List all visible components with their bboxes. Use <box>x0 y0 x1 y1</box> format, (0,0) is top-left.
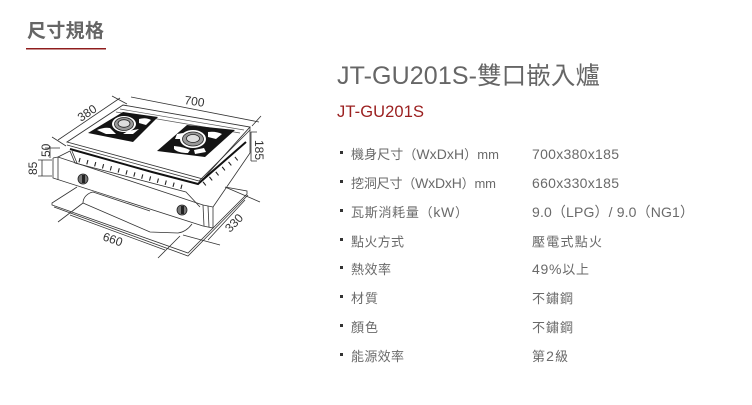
spec row: color: 顏色 <box>351 320 378 335</box>
dimension: 85: 85 <box>26 161 40 175</box>
spec row: gas consumption: 瓦斯消耗量（kW） <box>351 204 468 220</box>
cutout plate <box>52 187 248 256</box>
dimension: 50 <box>39 143 60 158</box>
spec row: thermal efficiency: 49%以上 <box>532 261 589 277</box>
spec row: energy rating: 第2級 <box>532 348 568 364</box>
spec row: ignition: 壓電式點火 <box>532 234 602 250</box>
spec row: thermal efficiency <box>340 261 589 277</box>
spec row: gas consumption: 9.0（LPG）/ 9.0（NG1） <box>532 204 694 220</box>
spec row: color <box>340 320 573 335</box>
dimension: 185: 185 <box>252 140 266 160</box>
dimension: 660 <box>58 203 180 258</box>
product title: JT-GU201S-雙口嵌入爐 <box>337 62 600 90</box>
section heading: 尺寸規格 <box>27 20 104 42</box>
spec row: cutout size: 660x330x185 <box>532 175 619 191</box>
spec row: thermal efficiency: 熱效率 <box>351 262 391 277</box>
spec row: cutout size <box>340 175 619 191</box>
dimension: 700 <box>131 93 261 126</box>
section heading <box>26 20 106 50</box>
dimension: 380 <box>52 96 127 146</box>
spec row: material: 不鏽鋼 <box>532 291 573 306</box>
dimension: 185 <box>251 132 266 161</box>
right burner <box>157 125 235 157</box>
cooktop surface <box>67 105 250 184</box>
dimension: 330: 330 <box>222 211 246 235</box>
spec list <box>340 146 694 364</box>
dimension: 660: 660 <box>101 230 125 249</box>
knob: left <box>78 174 88 184</box>
spec row: ignition: 點火方式 <box>351 234 404 250</box>
dimension: 330 <box>183 187 260 245</box>
spec row: energy rating: 能源效率 <box>351 349 404 364</box>
spec row: body size: 700x380x185 <box>532 146 619 162</box>
spec row: cutout size: 挖洞尺寸（WxDxH）mm <box>351 175 496 191</box>
spec row: body size <box>340 146 619 162</box>
spec row: color: 不鏽鋼 <box>532 320 573 335</box>
spec row: material <box>340 291 573 306</box>
stove body <box>52 127 250 228</box>
spec row: energy rating <box>340 348 568 364</box>
spec row: gas consumption <box>340 204 694 220</box>
knob: right <box>177 205 187 215</box>
left burner <box>88 112 158 142</box>
spec row: body size: 機身尺寸（WxDxH）mm <box>351 146 499 162</box>
dimension: 85 <box>26 160 52 176</box>
dimension: 50: 50 <box>39 143 53 157</box>
dimension: 700: 700 <box>184 93 206 110</box>
spec row: ignition <box>340 234 602 250</box>
model number: JT-GU201S <box>337 103 424 121</box>
product diagram: built-in stove with dimensions <box>26 93 266 258</box>
dimension: 380: 380 <box>75 102 100 124</box>
spec row: material: 材質 <box>351 291 378 306</box>
